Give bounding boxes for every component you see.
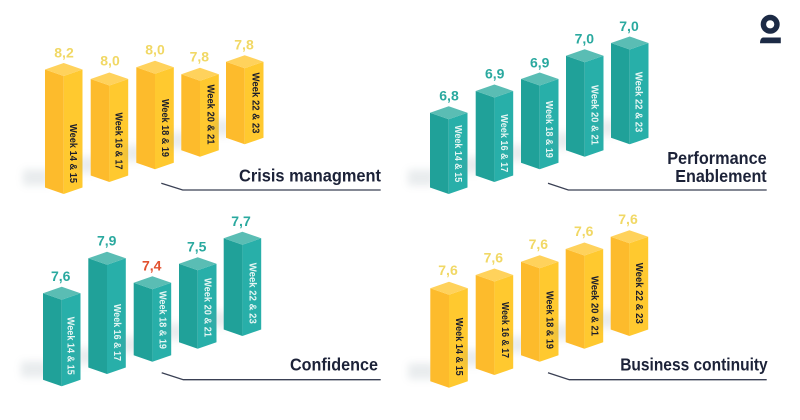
bar: week 16 and 17, value 7,9: Week 16 & 17	[111, 304, 122, 361]
bar: week 22 and 23, value 7,8	[214, 37, 264, 144]
bar: week 16 and 17, value 6,9: Week 16 & 17	[498, 114, 509, 173]
bar: week 20 and 21, value 7,5: 7,5	[187, 239, 207, 255]
bar: week 14 and 15, value 6,8	[408, 87, 468, 194]
panel: Business continuity	[408, 211, 768, 388]
bar: week 18 and 19, value 7,6: 7,6	[529, 236, 548, 252]
bar: week 22 and 23, value 7,7: Week 22 & 23	[246, 263, 257, 324]
bar: week 16 and 17, value 6,9	[464, 65, 513, 182]
bar: week 18 and 19, value 7,4 (red): Week 18 & 19	[156, 291, 167, 349]
bar: week 20 and 21, value 7,5: Week 20 & 21	[202, 278, 212, 337]
bar: week 16 and 17, value 7,6: 7,6	[484, 249, 503, 265]
bar: week 18 and 19, value 8,0: 8,0	[145, 41, 165, 57]
bar: week 14 and 15, value 8,2: 8,2	[54, 45, 74, 61]
bar: week 22 and 23, value 7,0: 7,0	[619, 18, 639, 34]
bar: week 22 and 23, value 7,8: 7,8	[234, 37, 254, 53]
bar: week 20 and 21, value 7,0	[554, 30, 604, 157]
bar: week 16 and 17, value 7,6: Week 16 & 17	[499, 302, 510, 358]
bar: week 14 and 15, value 7,6	[408, 262, 468, 388]
bar: week 20 and 21, value 7,0: 7,0	[575, 30, 594, 46]
heading: Crisis managment: Crisis managment	[239, 166, 381, 186]
bar: week 14 and 15, value 7,6	[21, 268, 80, 386]
heading: Performance Enablement	[667, 148, 767, 186]
bar: week 14 and 15, value 7,6: 7,6	[438, 262, 458, 278]
bar: week 16 and 17, value 7,9: 7,9	[97, 233, 117, 249]
bar: week 16 and 17, value 7,6	[464, 249, 513, 375]
icon: brand logo	[760, 18, 781, 43]
bar: week 22 and 23, value 7,7	[212, 213, 261, 336]
bar: week 20 and 21, value 7,8: Week 20 & 21	[205, 85, 216, 145]
bar: week 20 and 21, value 7,8: 7,8	[190, 49, 209, 65]
underline: Confidence	[162, 373, 381, 380]
bar: week 18 and 19, value 7,4 (red): 7,4	[142, 258, 162, 274]
bar: week 20 and 21, value 7,6: 7,6	[574, 223, 594, 239]
bar: week 18 and 19, value 8,0	[124, 41, 174, 169]
bar: week 22 and 23, value 7,0	[599, 18, 648, 144]
bar: week 14 and 15, value 7,6: Week 14 & 15	[453, 318, 464, 376]
underline: Performance Enablement	[548, 183, 767, 190]
bar: week 22 and 23, value 7,6: 7,6	[618, 211, 638, 227]
underline: Crisis managment	[161, 183, 381, 190]
bar: week 14 and 15, value 6,8: Week 14 & 15	[452, 125, 463, 183]
bar: week 22 and 23, value 7,7: 7,7	[231, 213, 251, 229]
bar: week 22 and 23, value 7,8: Week 22 & 23	[250, 72, 260, 134]
underline: Business continuity	[548, 373, 767, 380]
heading: Performance Enablement: Performance	[667, 148, 767, 168]
bar: week 20 and 21, value 7,8	[169, 49, 219, 157]
bar: week 20 and 21, value 7,0: Week 20 & 21	[588, 85, 600, 145]
bar: week 20 and 21, value 7,6: Week 20 & 21	[589, 276, 600, 336]
heading: Confidence: Confidence	[290, 355, 378, 375]
panel: Performance Enablement	[408, 18, 767, 194]
bar: week 18 and 19, value 6,9: Week 18 & 19	[543, 101, 554, 158]
bar: week 16 and 17, value 8,0: 8,0	[100, 53, 120, 69]
bar: week 16 and 17, value 8,0: Week 16 & 17	[112, 112, 123, 170]
bar: week 18 and 19, value 8,0: Week 18 & 19	[159, 99, 170, 157]
bar: week 16 and 17, value 6,9: 6,9	[485, 65, 505, 81]
bar: week 18 and 19, value 7,6	[509, 236, 558, 362]
bar: week 18 and 19, value 6,9: 6,9	[530, 54, 550, 70]
bar: week 14 and 15, value 8,2: Week 14 & 15	[67, 124, 78, 183]
bar: week 18 and 19, value 7,4 (red)	[122, 258, 171, 362]
bar: week 16 and 17, value 7,9	[76, 233, 126, 374]
heading: Business continuity: Business continuity	[620, 355, 768, 375]
panel: Crisis managment	[23, 37, 381, 194]
bar: week 14 and 15, value 7,6: Week 14 & 15	[64, 317, 76, 375]
bar: week 18 and 19, value 6,9	[509, 54, 558, 169]
bar: week 20 and 21, value 7,5	[167, 239, 216, 349]
bar: week 22 and 23, value 7,6	[599, 211, 648, 336]
bar: week 20 and 21, value 7,6	[554, 223, 603, 349]
panel: Confidence	[21, 213, 381, 386]
bar: week 22 and 23, value 7,6: Week 22 & 23	[633, 263, 644, 324]
bar: week 22 and 23, value 7,0: Week 22 & 23	[632, 72, 644, 133]
bar: week 14 and 15, value 8,2	[23, 45, 82, 194]
bar: week 16 and 17, value 8,0	[79, 53, 128, 182]
heading: Performance Enablement: Enablement	[675, 166, 767, 186]
bar: week 18 and 19, value 7,6: Week 18 & 19	[544, 291, 554, 349]
bar: week 14 and 15, value 7,6: 7,6	[51, 268, 71, 284]
bar: week 14 and 15, value 6,8: 6,8	[439, 87, 459, 103]
